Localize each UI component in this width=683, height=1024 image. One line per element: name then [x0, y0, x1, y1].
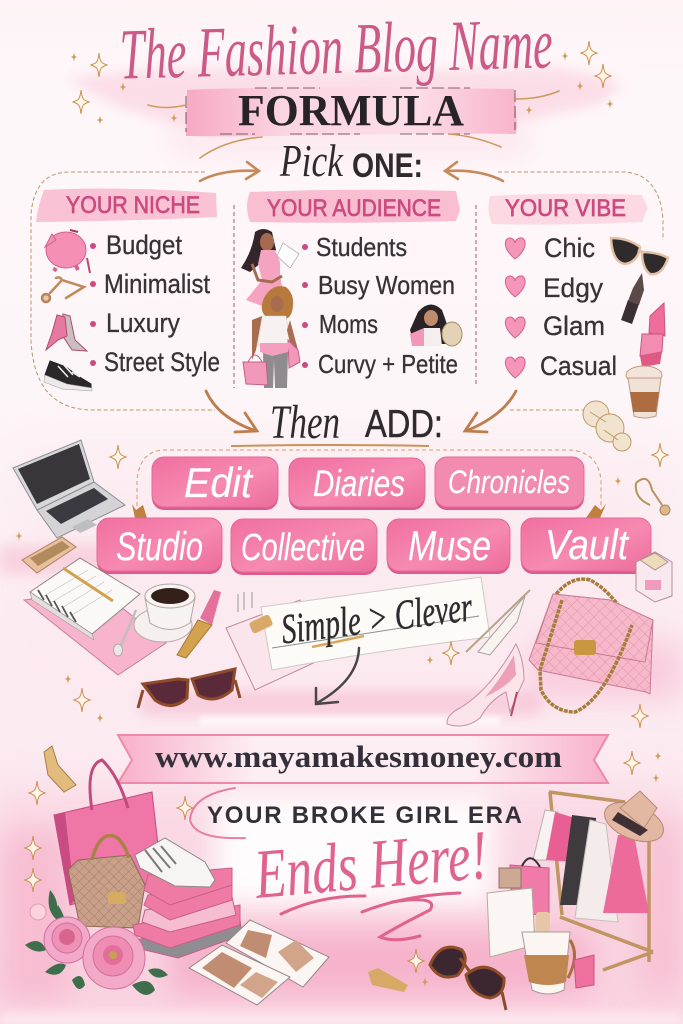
- list: audiences: Curvy + Petite: [318, 349, 458, 379]
- illustration: mom with coffee: [410, 304, 462, 346]
- button: Chronicles: [435, 457, 584, 510]
- list: audiences: Students: [316, 232, 407, 262]
- icon: pink case: [510, 858, 549, 917]
- icon: pink notebook: [24, 590, 166, 675]
- icon: hanging clothes: [533, 810, 649, 922]
- icon: hanger: [42, 277, 84, 302]
- column dividers: [234, 205, 476, 388]
- list: niches: Street Style: [104, 347, 220, 377]
- button: Diaries: Diaries: [313, 463, 405, 504]
- icon: coffee cup: [626, 366, 662, 418]
- banner: Formula: FORMULA: [238, 86, 464, 135]
- icon: roses: [30, 904, 145, 989]
- list: vibes with hearts: Casual: [540, 351, 617, 381]
- button: Studio: Studio: [116, 525, 203, 569]
- list: niches: [90, 230, 220, 377]
- icon: coffee cup and saucer: [134, 584, 195, 642]
- illustration: woman in pink: [241, 229, 299, 306]
- icon: tortoise sunglasses: [430, 947, 506, 1010]
- icon: dark lipstick: [621, 273, 644, 324]
- heading: Pick ONE: [279, 135, 423, 186]
- script flourish: [281, 893, 460, 940]
- icon: pink stiletto: [447, 644, 524, 726]
- icon: gold brooch: [583, 401, 631, 451]
- icon: gold mascara: [177, 590, 221, 658]
- heading: Then ADD: Then: [270, 396, 340, 449]
- ribbon: website: [118, 735, 608, 783]
- heading: Pick ONE: ONE:: [352, 147, 423, 185]
- button: Diaries: [289, 458, 425, 510]
- button: Collective: [231, 519, 377, 575]
- button: Edit: Edit: [184, 459, 254, 506]
- arrow from note: [316, 648, 359, 704]
- icon: piggy bank: [45, 230, 90, 273]
- ribbon: website: www.mayamakesmoney.com: [155, 739, 562, 774]
- icon: leaves: [25, 890, 168, 995]
- icon: gold sparkles lower: [25, 751, 662, 987]
- heading: Then ADD: ADD:: [365, 403, 443, 446]
- icon: gold comb: [368, 968, 408, 992]
- gold flourishes: [148, 91, 559, 158]
- sparkles: middle: [16, 443, 668, 728]
- header: your niche: [36, 189, 217, 222]
- icon: makeup cards: [22, 537, 76, 573]
- list: niches: Budget: [106, 230, 182, 260]
- icon: quilted handbag: [529, 579, 653, 712]
- icon: open planner with pen: [30, 558, 140, 640]
- list: vibes with hearts: [505, 233, 617, 381]
- icon: high heels: [46, 314, 87, 351]
- icon: white sneaker: [135, 838, 215, 887]
- panel: your audience: [241, 190, 462, 388]
- panel: your niche: [36, 189, 220, 391]
- arrows into Pick ONE: [200, 162, 503, 181]
- button: Edit: [152, 457, 278, 510]
- title brush wash: [65, 68, 622, 155]
- icon: sneaker: [44, 361, 92, 391]
- list: niches: Luxury: [106, 308, 180, 338]
- closing script: Ends Here: Ends Here!: [251, 817, 491, 914]
- list: niches: Minimalist: [104, 269, 210, 299]
- icon: gold necklace: [636, 479, 670, 515]
- list: vibes with hearts: Glam: [543, 311, 605, 341]
- list: audiences: Busy Women: [318, 270, 455, 300]
- heading: Then ADD: [231, 396, 443, 449]
- icon: perfume box: [487, 868, 535, 957]
- arrows to Then ADD: [206, 391, 516, 432]
- pink swirls behind closing text: [190, 788, 245, 838]
- icon: tan quilted bag: [68, 836, 145, 928]
- icon: sun hat: [599, 791, 669, 849]
- icon: small perfume: [44, 746, 76, 792]
- icon: laptop: [13, 440, 125, 538]
- icon: pen and glasses case: [466, 590, 530, 655]
- banner: Formula: [186, 86, 517, 136]
- icon: magazine spread: [189, 920, 329, 1005]
- icon: notepad behind note: [226, 592, 320, 690]
- sparkles: title: [70, 41, 614, 125]
- list: audiences: Moms: [319, 309, 378, 339]
- panel: your vibe: [488, 194, 668, 451]
- icon: folded clothes stack: [133, 868, 242, 958]
- button: Collective: Collective: [241, 527, 365, 569]
- icon: takeaway coffee: [522, 912, 575, 994]
- icon: pink lipstick: [640, 303, 665, 367]
- header: your niche: YOUR NICHE: [66, 192, 200, 219]
- header: your vibe: YOUR VIBE: [505, 195, 626, 222]
- button: Vault: Vault: [545, 521, 630, 568]
- icon: perfume bottle: [636, 552, 672, 602]
- list: vibes with hearts: Edgy: [543, 273, 603, 303]
- button: Muse: Muse: [408, 522, 491, 569]
- icon: small pink lipstick: [574, 955, 594, 988]
- list: vibes with hearts: Chic: [544, 233, 595, 263]
- note: Simple > Clever: [248, 577, 490, 670]
- icon: pink shopping bag: [54, 760, 162, 905]
- header: your audience: YOUR AUDIENCE: [267, 195, 441, 222]
- list: audiences: [302, 232, 458, 379]
- closing line: Your Broke Girl Era: YOUR BROKE GIRL ERA: [207, 802, 522, 829]
- note: Simple > Clever: Simple > Clever: [279, 584, 475, 653]
- illustration: woman with curls and shopping bags: [243, 286, 300, 388]
- button: Chronicles: Chronicles: [448, 464, 570, 500]
- dashed selection frame: [31, 172, 663, 410]
- icon: clothing rack: [549, 792, 653, 970]
- icon: brown sunglasses: [138, 669, 240, 708]
- icon: spoon: [114, 610, 136, 656]
- heading: Pick ONE: Pick: [279, 135, 344, 186]
- button: Vault: [521, 518, 651, 574]
- dashed connector with arrowheads: [132, 450, 606, 518]
- icon: sunglasses: [611, 238, 668, 274]
- button: Studio: [97, 518, 222, 574]
